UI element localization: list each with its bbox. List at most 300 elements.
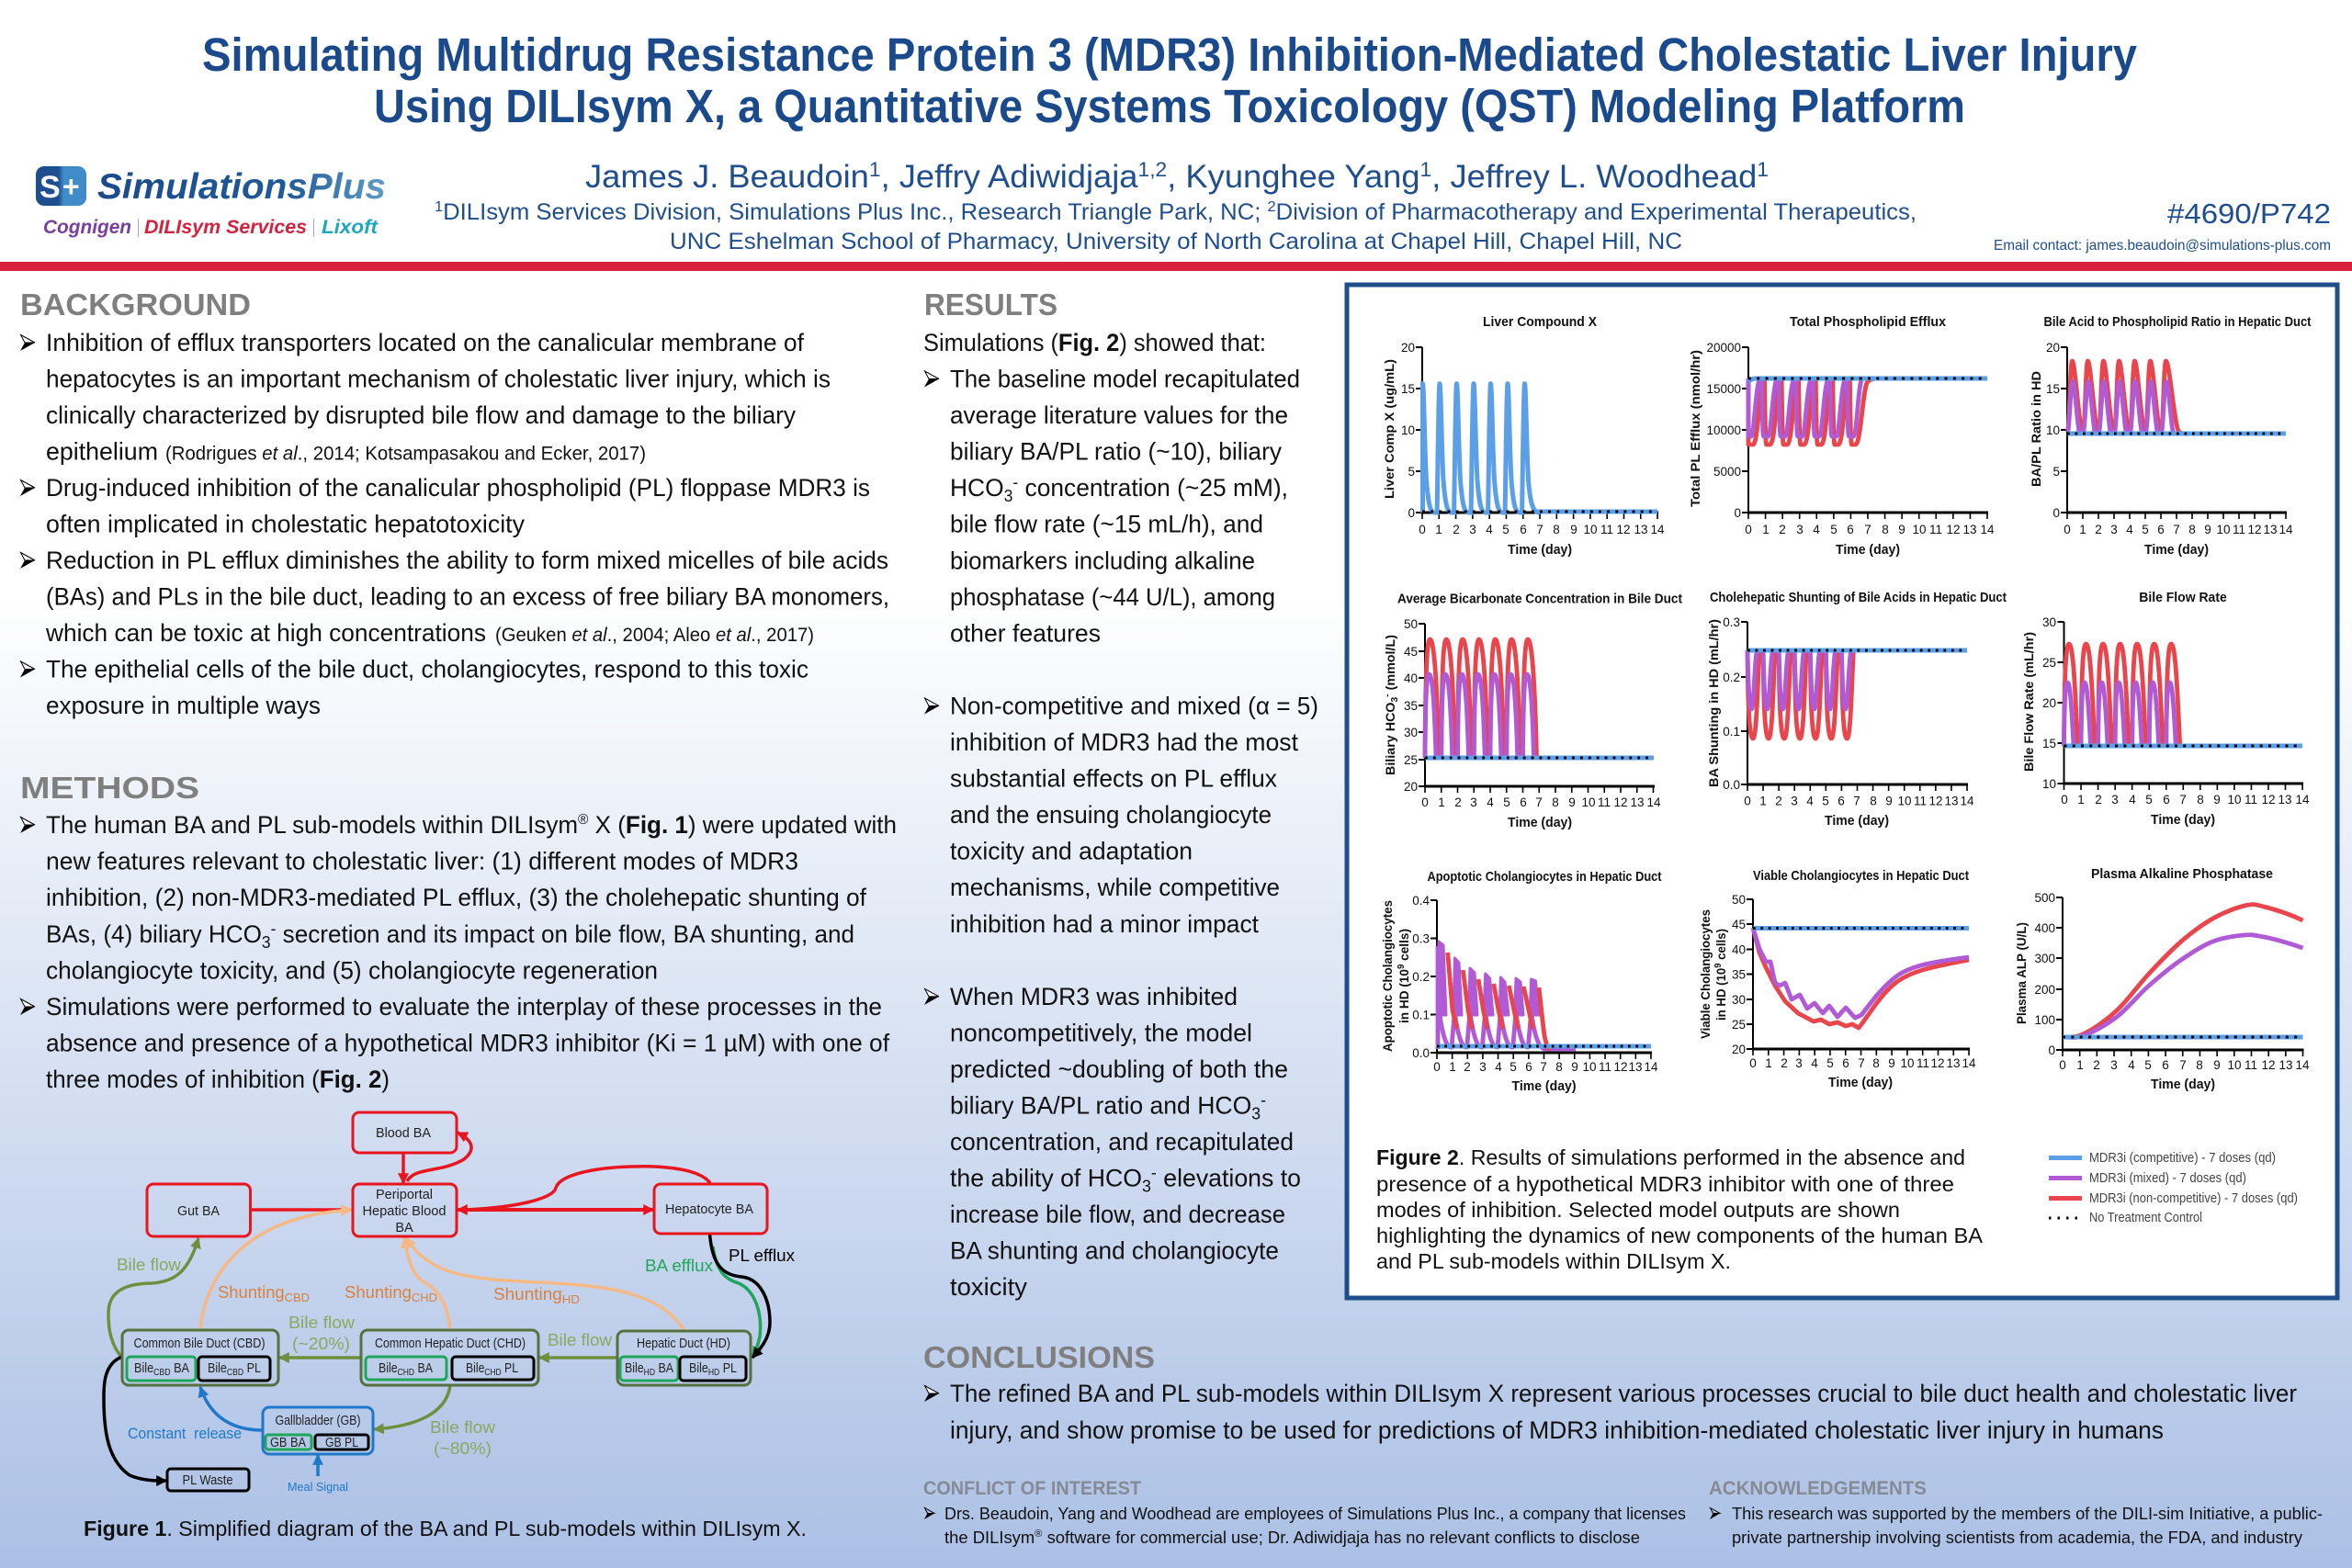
chart: Apoptotic Cholangiocytes in Hepatic Duct: 1: [1449, 1060, 1456, 1074]
chart: Plasma Alkaline Phosphatase: 12: [2261, 1058, 2276, 1072]
chart: Cholehepatic Shunting of Bile Acids in Hepatic Duct: 4: [1806, 795, 1814, 808]
chart: Viable Cholangiocytes in Hepatic Duct: in HD (10: [1713, 964, 1728, 1021]
results text: and the ensuing cholangiocyte: [950, 801, 1272, 829]
chart: Average Bicarbonate Concentration in Bile Duct: 40: [1404, 671, 1418, 685]
chart: Liver Compound X: 7: [1536, 523, 1544, 536]
chart: Average Bicarbonate Concentration in Bile Duct: 45: [1404, 645, 1418, 659]
chart: Bile Flow Rate: 11: [2245, 793, 2257, 807]
chart: Viable Cholangiocytes in Hepatic Duct: 2: [1781, 1056, 1788, 1070]
chart: Bile Acid to Phospholipid Ratio in Hepatic Duct: 0: [2064, 523, 2071, 536]
chart: Total Phospholipid Efflux: Time (day): [1836, 542, 1900, 558]
results text: concentration, and recapitulated: [950, 1128, 1294, 1156]
chart: Total Phospholipid Efflux: 4: [1813, 523, 1820, 536]
chart: Total Phospholipid Efflux: 20000: [1706, 341, 1741, 355]
diagram labels: HD: [562, 1292, 580, 1306]
chart: Total Phospholipid Efflux: 10: [1912, 523, 1927, 536]
chart: Apoptotic Cholangiocytes in Hepatic Duct: 0.2: [1412, 970, 1430, 984]
chart: Viable Cholangiocytes in Hepatic Duct: 3: [1795, 1056, 1803, 1070]
node: Hepatic Duct: HD: [708, 1368, 719, 1378]
chart: Liver Compound X: 10: [1401, 423, 1415, 437]
results text: Simulations (Fig. 2) showed that:: [923, 329, 1266, 356]
chart: Bile Acid to Phospholipid Ratio in Hepatic Duct: [2029, 314, 2312, 558]
node: Gut BA: Gut BA: [177, 1204, 220, 1219]
chart: Plasma Alkaline Phosphatase: 500: [2034, 891, 2055, 905]
panel: methods: [20, 771, 897, 1093]
chart: Cholehepatic Shunting of Bile Acids in Hepatic Duct: 0.2: [1723, 671, 1740, 684]
chart: Average Bicarbonate Concentration in Bile Duct: 0: [1421, 795, 1429, 809]
chart: Viable Cholangiocytes in Hepatic Duct: Viable Cholangiocytes in Hepatic Duct: [1753, 868, 1969, 884]
red divider bar: [0, 262, 2352, 271]
methods text: BAs, (4) biliary HCO: [46, 920, 269, 948]
results text: BA shunting and cholangiocyte: [950, 1237, 1279, 1265]
authors: 1: [1757, 158, 1769, 181]
chart: Plasma Alkaline Phosphatase: Plasma Alkaline Phosphatase: [2091, 866, 2273, 882]
authors: , Kyunghee Yang: [1167, 159, 1420, 195]
conflict text: software for commercial use; Dr. Adiwidjaja has no relevant conflicts to disclose: [1042, 1529, 1640, 1547]
chart: Apoptotic Cholangiocytes in Hepatic Duct: 9: [1571, 1060, 1578, 1074]
chart: Cholehepatic Shunting of Bile Acids in Hepatic Duct: 12: [1928, 795, 1943, 808]
diagram labels: CHD: [412, 1291, 437, 1304]
panel: figure 2: [1347, 285, 2337, 1298]
panel: acknowledgements: [1709, 1478, 2323, 1547]
chart: Total Phospholipid Efflux: 15000: [1706, 382, 1741, 396]
chart: Viable Cholangiocytes in Hepatic Duct: 9: [1713, 963, 1724, 968]
panel: results text: [923, 288, 1318, 1301]
node: Hepatic Duct: BA: [655, 1361, 673, 1376]
chart: Total Phospholipid Efflux: 13: [1962, 523, 1977, 536]
results text: [923, 329, 1318, 1301]
node: Common Bile Duct: [122, 1330, 278, 1385]
chart: Viable Cholangiocytes in Hepatic Duct: 1: [1765, 1056, 1772, 1070]
chart: Bile Flow Rate: Time (day): [2151, 812, 2215, 828]
figure 1: BA and PL sub-model diagram: [84, 1112, 807, 1540]
chart: Bile Acid to Phospholipid Ratio in Hepatic Duct: 7: [2173, 523, 2180, 536]
chart: Bile Acid to Phospholipid Ratio in Hepatic Duct: 12: [2247, 523, 2262, 536]
heading: results: RESULTS: [924, 288, 1057, 321]
chart: Apoptotic Cholangiocytes in Hepatic Duct: 12: [1613, 1060, 1628, 1074]
email contact: Email contact: james.beaudoin@simulations-plus.com: [1994, 238, 2331, 254]
chart: Apoptotic Cholangiocytes in Hepatic Duct: 11: [1599, 1060, 1611, 1074]
chart: Bile Flow Rate: 20: [2042, 696, 2056, 710]
chart: Average Bicarbonate Concentration in Bile Duct: 14: [1646, 795, 1661, 809]
background text: clinically characterized by disrupted bile flow and damage to the biliary: [46, 401, 796, 429]
chart: Plasma Alkaline Phosphatase: 4: [2128, 1058, 2135, 1072]
figure 2 caption: and PL sub-models within DILIsym X.: [1376, 1249, 1731, 1273]
figure 2 caption: highlighting the dynamics of new components of the human BA: [1376, 1224, 1984, 1247]
chart: Bile Acid to Phospholipid Ratio in Hepatic Duct: Bile Acid to Phospholipid Ratio in Hepatic Duct: [2043, 314, 2312, 330]
logo: Simulations Plus: +: [62, 170, 80, 203]
chart: Average Bicarbonate Concentration in Bile Duct: [1383, 592, 1682, 830]
chart: Viable Cholangiocytes in Hepatic Duct: Viable Cholangiocytes: [1698, 909, 1713, 1039]
affiliations: 1: [435, 199, 443, 215]
diagram labels: PL efflux: [729, 1246, 796, 1265]
chart: Bile Flow Rate: 13: [2278, 793, 2292, 807]
title: Using DILIsym X, a Quantitative Systems Toxicology (QST) Modeling Platform: [374, 80, 1965, 132]
chart: Total Phospholipid Efflux: Total PL Efflux (nmol/hr): [1688, 350, 1702, 507]
chart: Bile Acid to Phospholipid Ratio in Hepatic Duct: 10: [2216, 523, 2231, 536]
node: Blood BA: [353, 1112, 457, 1153]
logo: Simulations Plus: [36, 166, 386, 238]
diagram labels: Bile flow: [430, 1417, 496, 1437]
chart: Liver Compound X: 13: [1634, 523, 1648, 536]
chart: Liver Compound X: Liver Compound X: [1483, 314, 1597, 330]
methods text: The human BA and PL sub-models within DILIsym: [46, 811, 598, 839]
chart: Total Phospholipid Efflux: 0: [1745, 523, 1752, 536]
diagram labels: Meal Signal: [288, 1480, 348, 1494]
chart: Bile Acid to Phospholipid Ratio in Hepatic Duct: 9: [2204, 523, 2211, 536]
chart: Cholehepatic Shunting of Bile Acids in Hepatic Duct: 2: [1775, 795, 1782, 808]
methods text: [20, 811, 897, 1093]
chart: Cholehepatic Shunting of Bile Acids in Hepatic Duct: 7: [1853, 795, 1860, 808]
chart: Viable Cholangiocytes in Hepatic Duct: 0: [1749, 1056, 1757, 1070]
node: Common Hepatic Duct: BA: [414, 1361, 433, 1376]
background text: The epithelial cells of the bile duct, cholangiocytes, respond to this toxic: [46, 656, 808, 683]
chart: Bile Flow Rate: [2021, 590, 2310, 828]
node: Common Bile Duct: Common Bile Duct (CBD): [134, 1337, 265, 1351]
chart: Cholehepatic Shunting of Bile Acids in Hepatic Duct: 0.0: [1723, 778, 1740, 792]
methods text: new features relevant to cholestatic liver: (1) different modes of MDR3: [46, 848, 798, 875]
chart: Bile Acid to Phospholipid Ratio in Hepatic Duct: 10: [2046, 423, 2060, 437]
chart: Viable Cholangiocytes in Hepatic Duct: 7: [1858, 1056, 1865, 1070]
chart: Total Phospholipid Efflux: 5000: [1713, 465, 1741, 479]
chart: Viable Cholangiocytes in Hepatic Duct: [1698, 868, 1976, 1090]
chart: Bile Acid to Phospholipid Ratio in Hepatic Duct: BA/PL Ratio in HD: [2029, 371, 2043, 487]
chart: Viable Cholangiocytes in Hepatic Duct: 6: [1842, 1056, 1849, 1070]
chart: Cholehepatic Shunting of Bile Acids in Hepatic Duct: 5: [1822, 795, 1829, 808]
node: Common Bile Duct: BA: [171, 1361, 189, 1376]
chart: Apoptotic Cholangiocytes in Hepatic Duct: 0.3: [1412, 931, 1430, 946]
chart: Apoptotic Cholangiocytes in Hepatic Duct: 0.4: [1412, 894, 1430, 908]
chart: Cholehepatic Shunting of Bile Acids in Hepatic Duct: 0.3: [1723, 615, 1740, 629]
chart: Apoptotic Cholangiocytes in Hepatic Duct: 13: [1628, 1060, 1643, 1074]
chart: Viable Cholangiocytes in Hepatic Duct: 30: [1732, 993, 1746, 1007]
diagram labels: Shunting: [345, 1282, 412, 1302]
chart: Total Phospholipid Efflux: 7: [1864, 523, 1871, 536]
conflict text: [924, 1505, 1686, 1547]
methods text: Simulations were performed to evaluate the interplay of these processes in the: [46, 993, 882, 1021]
results text: 3: [1251, 1104, 1261, 1122]
diagram labels: Constant release: [128, 1425, 242, 1442]
diagram labels: BA efflux: [645, 1256, 714, 1275]
node: Common Hepatic Duct: Bile: [379, 1361, 401, 1376]
results text: biomarkers including alkaline: [950, 547, 1255, 574]
chart: Cholehepatic Shunting of Bile Acids in Hepatic Duct: 6: [1838, 795, 1845, 808]
node: Gallbladder: Gallbladder (GB): [276, 1414, 360, 1428]
diagram labels: [117, 1246, 796, 1494]
affiliations: Division of Pharmacotherapy and Experimental Therapeutics,: [1276, 199, 1917, 225]
affiliations: 2: [1268, 199, 1276, 215]
results text: When MDR3 was inhibited: [950, 983, 1238, 1010]
methods text: inhibition, (2) non-MDR3-mediated PL efflux, (3) the cholehepatic shunting of: [46, 884, 866, 911]
conflict text: ®: [1035, 1529, 1042, 1540]
chart: Apoptotic Cholangiocytes in Hepatic Duct: [1380, 869, 1662, 1094]
node: Periportal Hepatic Blood BA: [353, 1184, 457, 1236]
chart: Plasma Alkaline Phosphatase: 2: [2093, 1058, 2100, 1072]
chart: Bile Flow Rate: 4: [2129, 793, 2136, 807]
chart: Cholehepatic Shunting of Bile Acids in Hepatic Duct: 10: [1897, 795, 1912, 808]
chart: Liver Compound X: 9: [1570, 523, 1577, 536]
results text: mechanisms, while competitive: [950, 874, 1280, 901]
chart: Average Bicarbonate Concentration in Bile Duct: (mmol/L): [1383, 635, 1397, 694]
chart: Bile Acid to Phospholipid Ratio in Hepatic Duct: 11: [2233, 523, 2245, 536]
conclusions text: injury, and show promise to be used for predictions of MDR3 inhibition-mediated cholestatic liver injury in humans: [950, 1416, 2164, 1444]
results text: concentration (~25 mM),: [1018, 474, 1288, 502]
methods text: -: [271, 919, 276, 938]
logo: Simulations Plus: Cognigen: [43, 217, 131, 238]
authors: 1: [1420, 158, 1431, 181]
chart: Bile Flow Rate: Bile Flow Rate (mL/hr): [2021, 632, 2036, 772]
chart: Average Bicarbonate Concentration in Bile Duct: Time (day): [1508, 815, 1572, 830]
chart: Plasma Alkaline Phosphatase: 100: [2034, 1013, 2055, 1027]
chart: Plasma Alkaline Phosphatase: 14: [2295, 1058, 2310, 1072]
results text: toxicity: [950, 1273, 1027, 1301]
chart: Bile Flow Rate: 10: [2042, 777, 2056, 791]
chart: Apoptotic Cholangiocytes in Hepatic Duct: 8: [1555, 1060, 1563, 1074]
chart: Viable Cholangiocytes in Hepatic Duct: 4: [1811, 1056, 1818, 1070]
chart: Viable Cholangiocytes in Hepatic Duct: 35: [1732, 968, 1746, 981]
acknowledgements text: [1710, 1505, 2323, 1547]
chart: Apoptotic Cholangiocytes in Hepatic Duct: Apoptotic Cholangiocytes in Hepatic Duct: [1428, 869, 1662, 885]
background text: exposure in multiple ways: [46, 692, 321, 719]
authors: James J. Beaudoin: [585, 159, 859, 195]
node: Common Bile Duct: CBD: [153, 1368, 171, 1378]
chart: Viable Cholangiocytes in Hepatic Duct: 10: [1900, 1056, 1915, 1070]
authors: , Jeffry Adiwidjaja: [881, 159, 1138, 195]
affiliations: UNC Eshelman School of Pharmacy, University of North Carolina at Chapel Hill, Chapel Hill, NC: [670, 229, 1682, 254]
chart: Liver Compound X: 5: [1502, 523, 1510, 536]
chart: Bile Flow Rate: 5: [2145, 793, 2153, 807]
chart: Total Phospholipid Efflux: 2: [1779, 523, 1786, 536]
chart: Liver Compound X: Time (day): [1508, 542, 1572, 558]
chart: Viable Cholangiocytes in Hepatic Duct: 14: [1962, 1056, 1976, 1070]
figure 1 caption: Figure 1. Simplified diagram of the BA and PL sub-models within DILIsym X.: [84, 1517, 807, 1540]
chart: Apoptotic Cholangiocytes in Hepatic Duct: Time (day): [1512, 1078, 1577, 1094]
node: Gallbladder: GB BA: [270, 1436, 306, 1450]
background text: (Geuken et al., 2004; Aleo et al., 2017): [495, 625, 814, 646]
chart: Apoptotic Cholangiocytes in Hepatic Duct: 6: [1525, 1060, 1532, 1074]
chart: Total Phospholipid Efflux: 10000: [1706, 423, 1741, 437]
legend: [2049, 1151, 2298, 1225]
chart: Bile Flow Rate: 0: [2061, 793, 2068, 807]
chart: Plasma Alkaline Phosphatase: 300: [2034, 952, 2055, 965]
chart: Bile Flow Rate: 15: [2042, 737, 2056, 750]
chart: Bile Acid to Phospholipid Ratio in Hepatic Duct: 6: [2157, 523, 2165, 536]
chart: Liver Compound X: 10: [1583, 523, 1598, 536]
chart: Average Bicarbonate Concentration in Bile Duct: Average Bicarbonate Concentration in Bile Duct: [1397, 592, 1682, 607]
conflict text: the DILIsym: [944, 1529, 1033, 1547]
chart: Apoptotic Cholangiocytes in Hepatic Duct: in HD (10: [1396, 967, 1411, 1023]
chart: Plasma Alkaline Phosphatase: 0: [2059, 1058, 2066, 1072]
chart: Average Bicarbonate Concentration in Bile Duct: 20: [1404, 780, 1418, 794]
arrows: olive bile flow: [108, 1238, 617, 1429]
results text: inhibition had a minor impact: [950, 910, 1259, 938]
chart: Cholehepatic Shunting of Bile Acids in Hepatic Duct: 1: [1759, 795, 1767, 808]
chart: Total Phospholipid Efflux: 0: [1734, 506, 1741, 520]
background text: Inhibition of efflux transporters located on the canalicular membrane of: [46, 329, 804, 356]
methods text: secretion and its impact on bile flow, BA shunting, and: [276, 920, 854, 948]
node: Periportal Hepatic Blood BA: Hepatic Blood: [362, 1204, 447, 1219]
arrows: BA efflux, PL efflux, PL waste: [104, 1234, 770, 1481]
chart: Cholehepatic Shunting of Bile Acids in Hepatic Duct: 11: [1914, 795, 1927, 808]
node: Hepatic Duct: Bile: [689, 1361, 711, 1376]
chart: Average Bicarbonate Concentration in Bile Duct: 3: [1470, 795, 1477, 809]
chart: Apoptotic Cholangiocytes in Hepatic Duct: Apoptotic Cholangiocytes: [1380, 900, 1395, 1052]
chart: Bile Flow Rate: 1: [2077, 793, 2085, 807]
logo: Simulations Plus: Lixoft: [322, 217, 379, 238]
chart: Viable Cholangiocytes in Hepatic Duct: 20: [1732, 1043, 1746, 1056]
chart: Cholehepatic Shunting of Bile Acids in Hepatic Duct: 9: [1885, 795, 1893, 808]
chart: Total Phospholipid Efflux: 9: [1898, 523, 1905, 536]
chart: Liver Compound X: 15: [1401, 382, 1415, 396]
chart: Cholehepatic Shunting of Bile Acids in Hepatic Duct: 14: [1960, 795, 1974, 808]
chart: Cholehepatic Shunting of Bile Acids in Hepatic Duct: Cholehepatic Shunting of Bile Acids in Hepatic Duct: [1710, 590, 2007, 605]
chart: Liver Compound X: 11: [1600, 523, 1613, 536]
chart: Total Phospholipid Efflux: 3: [1796, 523, 1804, 536]
results text: -: [1261, 1091, 1266, 1110]
figure 2 caption: presence of a hypothetical MDR3 inhibitor with one of three: [1376, 1172, 1954, 1196]
chart: Plasma Alkaline Phosphatase: 6: [2162, 1058, 2169, 1072]
chart: Cholehepatic Shunting of Bile Acids in Hepatic Duct: Time (day): [1825, 813, 1889, 829]
chart: Plasma Alkaline Phosphatase: 8: [2196, 1058, 2203, 1072]
chart: Bile Flow Rate: 9: [2213, 793, 2221, 807]
chart: Plasma Alkaline Phosphatase: 11: [2245, 1058, 2257, 1072]
chart: Plasma Alkaline Phosphatase: 9: [2213, 1058, 2221, 1072]
legend: MDR3i (competitive) - 7 doses (qd): [2089, 1151, 2276, 1166]
node: Hepatic Duct: Hepatic Duct (HD): [637, 1337, 730, 1351]
chart: Average Bicarbonate Concentration in Bile Duct: 6: [1520, 795, 1527, 809]
conclusions text: [924, 1380, 2297, 1444]
legend: No Treatment Control: [2089, 1211, 2202, 1225]
results text: substantial effects on PL efflux: [950, 765, 1277, 793]
arrows: red blood flows: [250, 1133, 710, 1210]
chart: Liver Compound X: 4: [1486, 523, 1493, 536]
background text: Reduction in PL efflux diminishes the ability to form mixed micelles of bile acids: [46, 547, 888, 574]
node: Common Hepatic Duct: PL: [502, 1361, 518, 1376]
chart: Average Bicarbonate Concentration in Bile Duct: 10: [1581, 795, 1596, 809]
chart: Average Bicarbonate Concentration in Bile Duct: 13: [1630, 795, 1645, 809]
diagram labels: CBD: [285, 1291, 310, 1304]
methods text: Fig. 1) were updated with: [626, 811, 905, 839]
chart: Liver Compound X: 0: [1408, 506, 1415, 520]
node: Gallbladder: [263, 1407, 373, 1454]
chart: Liver Compound X: 3: [1469, 523, 1476, 536]
node: PL Waste: [167, 1469, 249, 1491]
chart: Bile Acid to Phospholipid Ratio in Hepatic Duct: 20: [2046, 341, 2060, 355]
results text: elevations to: [1157, 1165, 1301, 1192]
chart: Total Phospholipid Efflux: 1: [1762, 523, 1770, 536]
figure 2 caption: [1376, 1145, 1984, 1273]
chart: Apoptotic Cholangiocytes in Hepatic Duct: 4: [1495, 1060, 1502, 1074]
diagram labels: (~80%): [434, 1438, 492, 1458]
panel: background: [20, 288, 889, 719]
diagram labels: Bile flow: [288, 1313, 356, 1332]
results text: HCO: [950, 474, 1005, 502]
chart: Cholehepatic Shunting of Bile Acids in Hepatic Duct: 13: [1944, 795, 1959, 808]
chart: Bile Flow Rate: 10: [2227, 793, 2242, 807]
figure 2 frame: [1347, 285, 2337, 1298]
node: Blood BA: Blood BA: [376, 1126, 431, 1141]
chart: Apoptotic Cholangiocytes in Hepatic Duct: 3: [1479, 1060, 1487, 1074]
chart: Liver Compound X: 0: [1419, 523, 1426, 536]
background text: Drug-induced inhibition of the canalicular phospholipid (PL) floppase MDR3 is: [46, 474, 870, 502]
chart: Bile Flow Rate: 8: [2197, 793, 2204, 807]
chart: Bile Acid to Phospholipid Ratio in Hepatic Duct: 13: [2263, 523, 2278, 536]
results text: toxicity and adaptation: [950, 838, 1193, 865]
results text: the ability of HCO: [950, 1165, 1145, 1192]
chart: Bile Flow Rate: 14: [2295, 793, 2310, 807]
node: Hepatic Duct: HD: [644, 1368, 655, 1378]
chart: Average Bicarbonate Concentration in Bile Duct: Biliary HCO: [1383, 704, 1397, 775]
chart: Liver Compound X: 14: [1650, 523, 1665, 536]
chart: Bile Acid to Phospholipid Ratio in Hepatic Duct: 0: [2052, 506, 2060, 520]
methods text: X (: [588, 811, 626, 839]
node: Common Bile Duct: PL: [243, 1361, 261, 1376]
chart: Bile Acid to Phospholipid Ratio in Hepatic Duct: 2: [2095, 523, 2102, 536]
chart: Apoptotic Cholangiocytes in Hepatic Duct: 0: [1433, 1060, 1441, 1074]
chart: Plasma Alkaline Phosphatase: 0: [2048, 1043, 2055, 1057]
chart: Plasma Alkaline Phosphatase: 1: [2076, 1058, 2084, 1072]
affiliations: [435, 199, 1917, 254]
chart: Apoptotic Cholangiocytes in Hepatic Duct: 9: [1396, 964, 1407, 969]
node: Periportal Hepatic Blood BA: BA: [395, 1221, 413, 1235]
chart: Bile Acid to Phospholipid Ratio in Hepatic Duct: Time (day): [2144, 542, 2209, 558]
heading: acknowledgements: ACKNOWLEDGEMENTS: [1709, 1478, 1927, 1499]
background text: epithelium: [46, 437, 158, 465]
chart: Average Bicarbonate Concentration in Bile Duct: 3: [1390, 696, 1400, 702]
chart: Bile Flow Rate: Bile Flow Rate: [2139, 590, 2227, 605]
chart: Viable Cholangiocytes in Hepatic Duct: cells): [1713, 929, 1728, 963]
results text: The baseline model recapitulated: [950, 366, 1300, 393]
chart: Liver Compound X: [1382, 314, 1665, 558]
chart: Bile Flow Rate: 30: [2042, 615, 2056, 629]
legend: MDR3i (mixed) - 7 doses (qd): [2089, 1171, 2246, 1186]
logo: Simulations Plus: S: [40, 170, 61, 205]
chart: Bile Flow Rate: 25: [2042, 656, 2056, 670]
node: Hepatic Duct: Bile: [625, 1361, 647, 1376]
methods text: cholangiocyte toxicity, and (5) cholangiocyte regeneration: [46, 956, 658, 984]
chart: Total Phospholipid Efflux: 5: [1830, 523, 1838, 536]
legend: MDR3i (non-competitive) - 7 doses (qd): [2089, 1191, 2298, 1206]
chart: Average Bicarbonate Concentration in Bile Duct: 1: [1438, 795, 1445, 809]
results text: biliary BA/PL ratio and HCO: [950, 1091, 1257, 1119]
results text: Non-competitive and mixed (α = 5): [950, 693, 1318, 720]
methods text: absence and presence of a hypothetical MDR3 inhibitor (Ki = 1 µM) with one of: [46, 1030, 889, 1057]
title: [202, 28, 2138, 132]
results text: noncompetitively, the model: [950, 1019, 1252, 1046]
chart: Cholehepatic Shunting of Bile Acids in Hepatic Duct: 0.1: [1723, 725, 1740, 739]
chart: Plasma Alkaline Phosphatase: 13: [2278, 1058, 2293, 1072]
node: Common Hepatic Duct: CHD: [398, 1368, 414, 1378]
heading: conflict of interest: CONFLICT OF INTEREST: [923, 1478, 1141, 1499]
acknowledgements text: This research was supported by the members of the DILI-sim Initiative, a public-: [1732, 1505, 2323, 1523]
node: Hepatocyte BA: Hepatocyte BA: [665, 1202, 753, 1217]
arrows: orange shunting: [200, 1210, 684, 1330]
chart: Viable Cholangiocytes in Hepatic Duct: 25: [1732, 1018, 1746, 1032]
chart: Viable Cholangiocytes in Hepatic Duct: 40: [1732, 942, 1746, 957]
chart: Plasma Alkaline Phosphatase: 400: [2034, 921, 2055, 935]
chart: Plasma Alkaline Phosphatase: Time (day): [2151, 1077, 2215, 1092]
chart: Total Phospholipid Efflux: 8: [1882, 523, 1889, 536]
chart: Viable Cholangiocytes in Hepatic Duct: Time (day): [1828, 1075, 1893, 1090]
chart: Average Bicarbonate Concentration in Bile Duct: 30: [1404, 726, 1418, 739]
node: Common Hepatic Duct: CHD: [484, 1368, 502, 1378]
panel: conflict of interest: [923, 1478, 1686, 1547]
results text: -: [1151, 1164, 1157, 1182]
node: Periportal Hepatic Blood BA: Periportal: [376, 1188, 433, 1202]
chart: Apoptotic Cholangiocytes in Hepatic Duct: 10: [1582, 1060, 1597, 1074]
chart: Plasma Alkaline Phosphatase: 7: [2179, 1058, 2187, 1072]
chart: Viable Cholangiocytes in Hepatic Duct: 12: [1930, 1056, 1945, 1070]
